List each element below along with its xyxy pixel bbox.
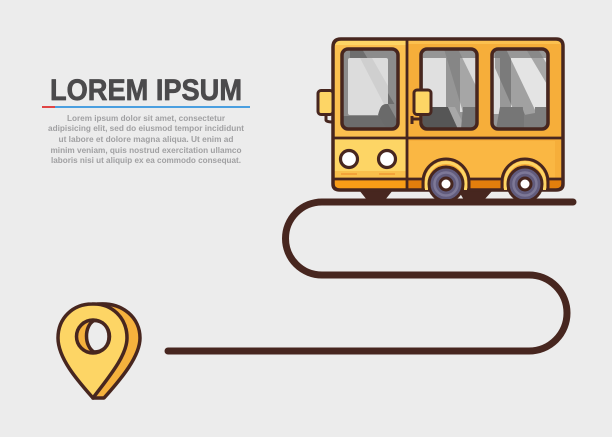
rear mirror	[318, 90, 333, 122]
middle window	[421, 49, 477, 129]
infographic canvas	[42, 37, 576, 400]
road overlap	[340, 199, 560, 206]
marker lights	[341, 173, 395, 175]
pin face	[58, 304, 127, 398]
location pin	[58, 304, 140, 398]
bus	[318, 39, 563, 206]
body outline	[333, 39, 563, 190]
rear body	[407, 39, 563, 190]
road path	[168, 202, 573, 351]
body text: adipisicing elit, sed do eiusmod tempor incididunt	[48, 124, 244, 133]
title underline	[42, 106, 250, 108]
body text: Lorem ipsum dolor sit amet, consectetur	[67, 114, 225, 123]
front body	[333, 39, 407, 190]
headlights	[340, 150, 396, 168]
door mirror	[412, 90, 431, 124]
body text: minim veniam, quis nostrud exercitation ullamco	[50, 146, 242, 155]
front window	[342, 49, 398, 129]
undercarriage	[359, 190, 493, 200]
rear window	[492, 49, 548, 129]
body text: laboris nisi ut aliquip ex ea commodo consequat.	[51, 156, 241, 165]
bottom stripe	[334, 180, 406, 190]
pin hole	[76, 320, 110, 353]
body text: ut labore et dolore magna aliqua. Ut enim ad	[58, 135, 234, 144]
wheel arches and wheels	[423, 159, 548, 201]
body text	[48, 114, 244, 165]
title: LOREM IPSUM	[50, 74, 242, 107]
pin back side	[93, 304, 140, 398]
